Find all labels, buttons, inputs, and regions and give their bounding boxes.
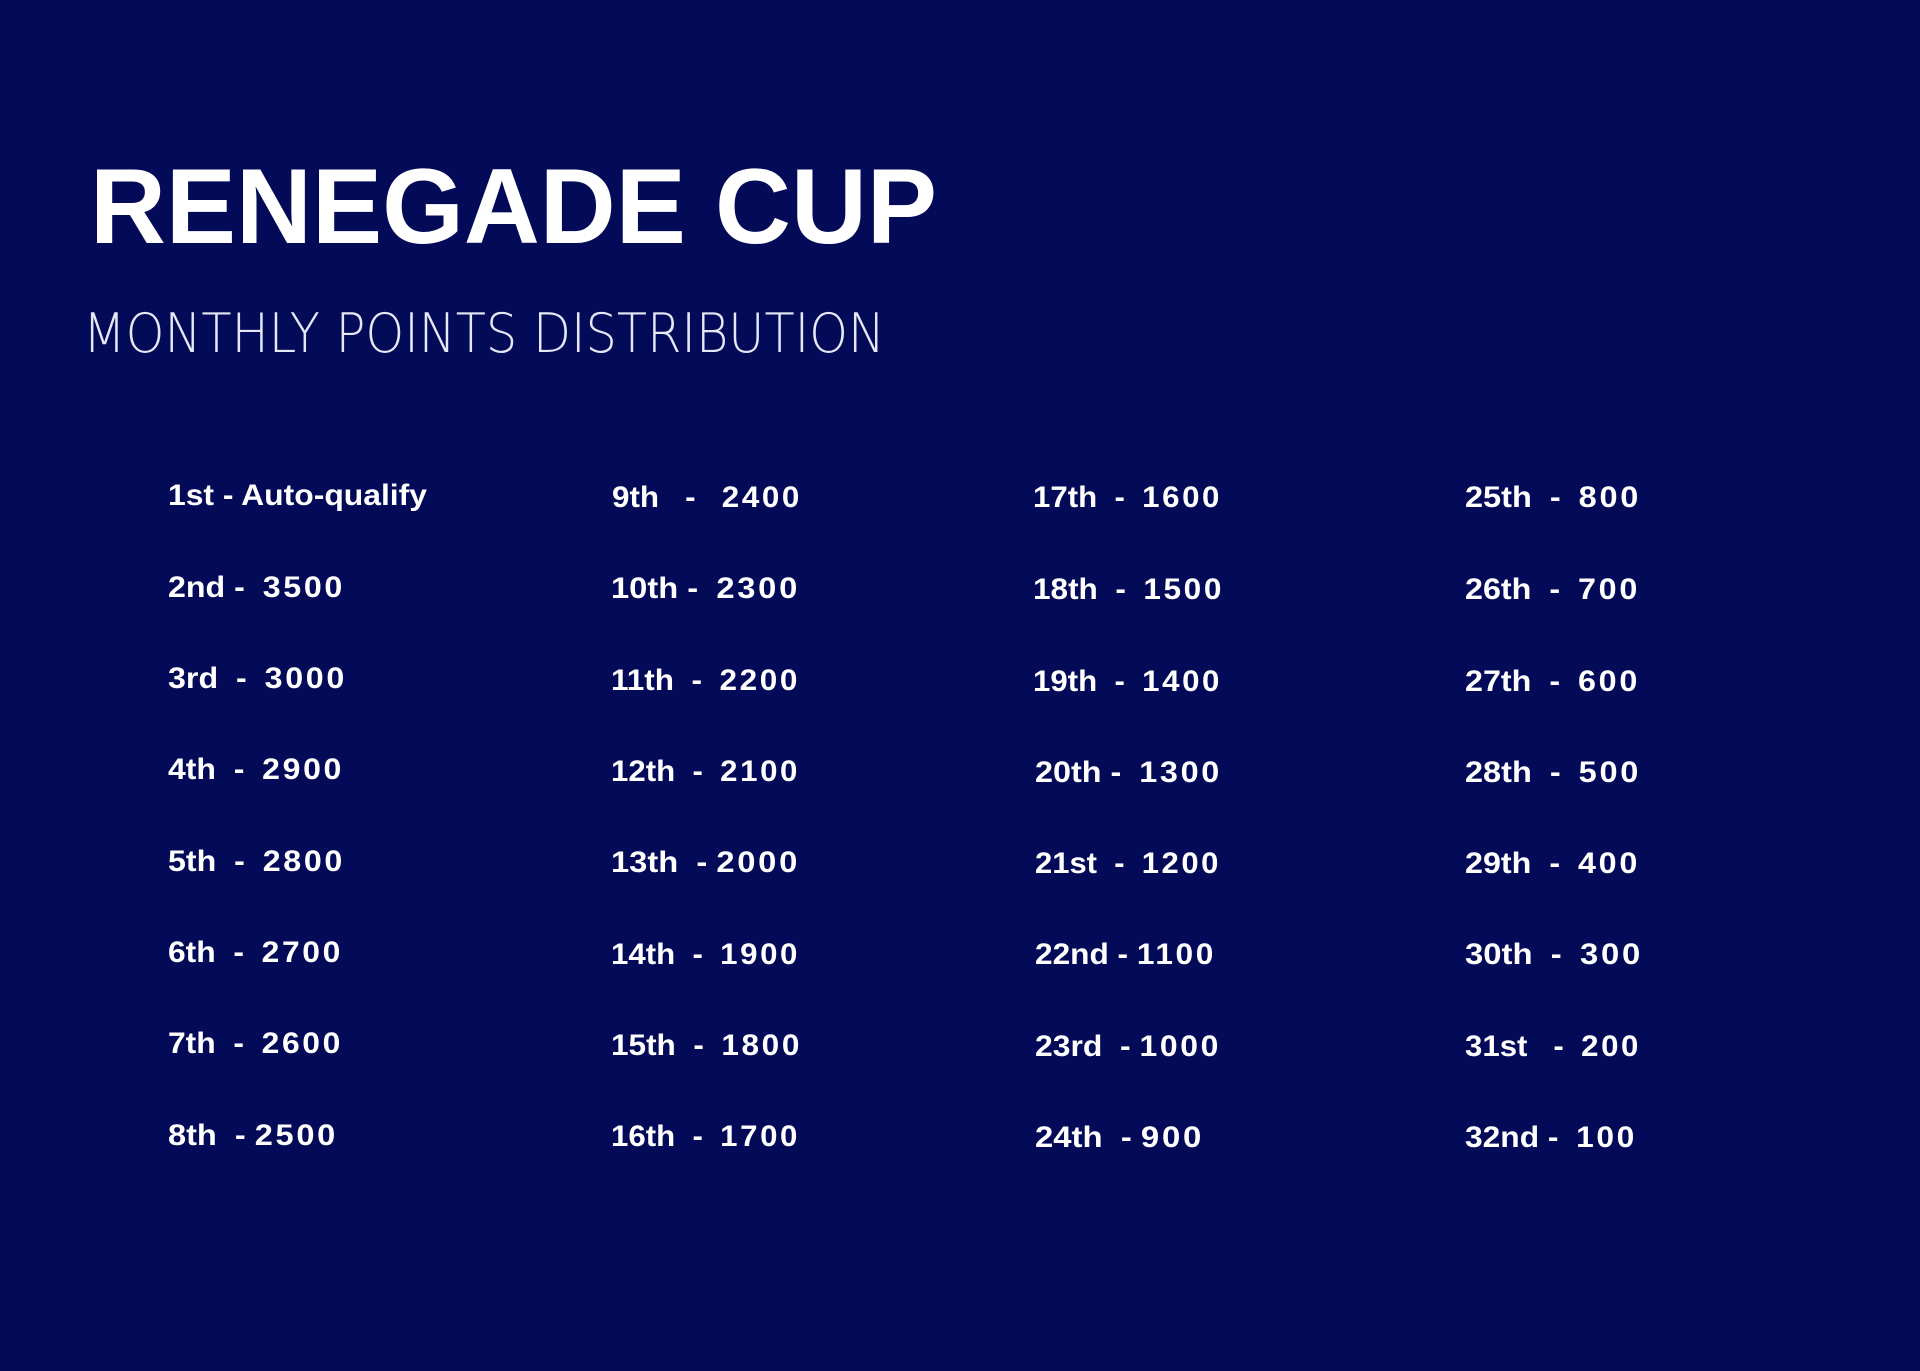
entry: 22nd place: 22nd - 1100 xyxy=(1035,938,1216,971)
entry: 10th place: 10th - 2300 xyxy=(611,572,800,605)
entry: 12th place: 12th - 2100 xyxy=(611,755,800,788)
entry: 31st place: 31st - 200 xyxy=(1465,1030,1641,1063)
entry: 28th place: 28th - 500 xyxy=(1465,756,1641,789)
entry: 5th place: 5th - 2800 xyxy=(168,845,345,878)
entry: 15th place: 15th - 1800 xyxy=(611,1029,802,1062)
entry: 3rd place: 3rd - 3000 xyxy=(168,662,347,695)
entry: 25th place: 25th - 800 xyxy=(1465,481,1641,514)
entry: 26th place: 26th - 700 xyxy=(1465,573,1640,606)
entry: 2nd place: 2nd - 3500 xyxy=(168,571,345,604)
entry: 7th place: 7th - 2600 xyxy=(168,1027,343,1060)
entry: 17th place: 17th - 1600 xyxy=(1033,481,1222,514)
entry: 18th place: 18th - 1500 xyxy=(1033,573,1224,606)
entry: 20th place: 20th - 1300 xyxy=(1035,756,1222,789)
entry: 30th place: 30th - 300 xyxy=(1465,938,1643,971)
title: RENEGADE CUP xyxy=(90,146,937,266)
entry: 21st place: 21st - 1200 xyxy=(1035,847,1221,880)
entry: 9th place: 9th - 2400 xyxy=(612,481,802,514)
entry: 16th place: 16th - 1700 xyxy=(611,1120,800,1153)
entry: 29th place: 29th - 400 xyxy=(1465,847,1640,880)
entry: 27th place: 27th - 600 xyxy=(1465,665,1640,698)
entry: 19th place: 19th - 1400 xyxy=(1033,665,1222,698)
column: places 25 to 32 xyxy=(1465,481,1643,1154)
subtitle: MONTHLY POINTS DISTRIBUTION xyxy=(83,302,885,365)
entry: 14th place: 14th - 1900 xyxy=(611,938,800,971)
entry: 23rd place: 23rd - 1000 xyxy=(1035,1030,1221,1063)
column: places 9 to 16 xyxy=(611,481,802,1153)
entry: 1st place: 1st - Auto-qualify xyxy=(168,479,427,512)
entry: 4th place: 4th - 2900 xyxy=(168,753,344,786)
column: places 1 to 8 xyxy=(168,479,427,1152)
entry: 32nd place: 32nd - 100 xyxy=(1465,1121,1637,1154)
entry: 24th place: 24th - 900 xyxy=(1035,1121,1204,1154)
column: places 17 to 24 xyxy=(1033,481,1224,1154)
entry: 8th place: 8th - 2500 xyxy=(168,1119,338,1152)
entry: 11th place: 11th - 2200 xyxy=(611,664,800,697)
entry: 13th place: 13th - 2000 xyxy=(611,846,800,879)
entry: 6th place: 6th - 2700 xyxy=(168,936,343,969)
